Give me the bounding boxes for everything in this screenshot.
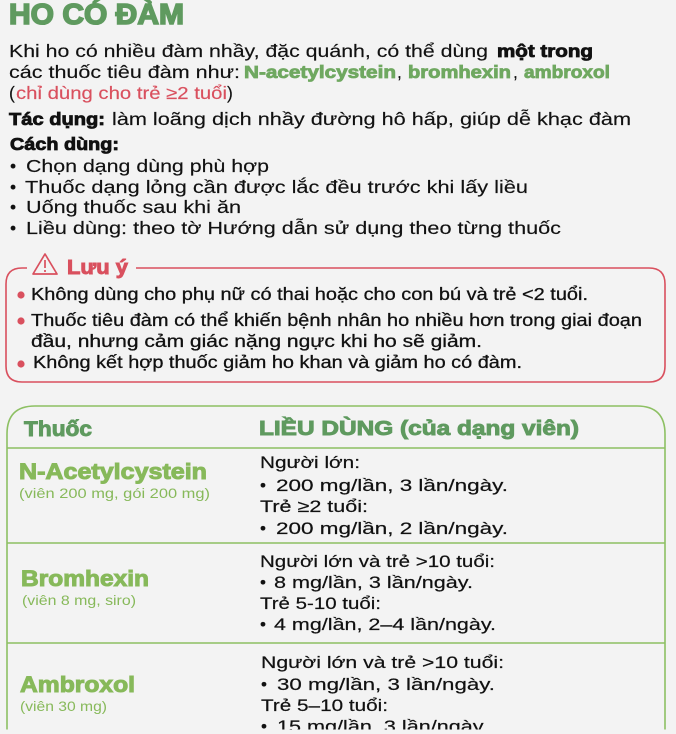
usage list: •: [10, 197, 16, 217]
usage list: •: [10, 218, 16, 238]
usage list: Thuốc dạng lỏng cần được lắc đều trước khi lấy liều: [25, 176, 528, 197]
row: N-Acetylcystein: 200 mg/lần, 2 lần/ngày.: [276, 519, 508, 538]
usage list: Cách dùng:: [10, 134, 119, 154]
row: Ambroxol: Người lớn và trẻ >10 tuổi:: [261, 653, 504, 672]
row: Bromhexin: Người lớn và trẻ >10 tuổi:: [260, 552, 495, 571]
usage list: •: [10, 177, 16, 197]
row: N-Acetylcystein: •: [260, 476, 266, 495]
intro text block: bromhexin: [408, 62, 511, 82]
row: N-Acetylcystein: •: [260, 519, 266, 538]
note items: Không dùng cho phụ nữ có thai hoặc cho con bú và trẻ <2 tuổi.: [31, 284, 588, 304]
row: N-Acetylcystein: Trẻ ≥2 tuổi:: [260, 497, 368, 516]
table header: LIỀU DÙNG (của dạng viên): [259, 416, 579, 440]
intro text block: ,: [397, 62, 402, 82]
panel: warning note: [6, 254, 665, 382]
row: Bromhexin: Bromhexin: [21, 566, 149, 591]
row: Bromhexin: •: [260, 573, 266, 592]
row: Bromhexin: 4 mg/lần, 2–4 lần/ngày.: [274, 615, 496, 634]
usage list: Liều dùng: theo tờ Hướng dẫn sử dụng theo từng thuốc: [26, 217, 561, 238]
usage list: [10, 134, 561, 238]
icon: warning triangle: [33, 254, 57, 274]
row: Bromhexin: (viên 8 mg, siro): [22, 593, 136, 608]
table header: Thuốc: [24, 418, 92, 441]
row: Ambroxol: •: [261, 675, 267, 694]
intro text block: (: [9, 83, 15, 103]
note items: Không kết hợp thuốc giảm ho khan và giảm ho có đàm.: [33, 352, 522, 372]
row: Ambroxol: Trẻ 5–10 tuổi:: [261, 696, 388, 715]
intro text block: Khi ho có nhiều đàm nhầy, đặc quánh, có thể dùng: [9, 41, 488, 61]
note items: Thuốc tiêu đàm có thể khiến bệnh nhân ho nhiều hơn trong giai đoạn: [31, 310, 642, 330]
effect line: Tác dụng:: [9, 109, 105, 129]
row: Bromhexin: Trẻ 5-10 tuổi:: [260, 594, 381, 613]
effect line: [9, 108, 631, 129]
intro text block: ambroxol: [524, 62, 610, 82]
row: Ambroxol: [20, 653, 504, 734]
note items: đầu, nhưng cảm giác nặng ngực khi ho sẽ giảm.: [31, 331, 482, 351]
intro text block: ): [227, 83, 233, 103]
intro text block: các thuốc tiêu đàm như:: [9, 62, 240, 82]
row: Ambroxol: Ambroxol: [20, 672, 135, 697]
panel: dosage table: [7, 406, 665, 734]
row: Bromhexin: •: [260, 615, 266, 634]
row: N-Acetylcystein: Người lớn:: [260, 453, 360, 472]
usage list: Chọn dạng dùng phù hợp: [26, 156, 269, 176]
table header: [24, 416, 579, 441]
intro text block: ,: [513, 62, 518, 82]
intro text block: một trong: [497, 41, 593, 61]
intro text block: [9, 41, 610, 103]
row: N-Acetylcystein: 200 mg/lần, 3 lần/ngày.: [276, 476, 508, 495]
note items: [17, 284, 642, 372]
row: Bromhexin: [21, 552, 496, 634]
row: Bromhexin: 8 mg/lần, 3 lần/ngày.: [274, 573, 473, 592]
effect line: làm loãng dịch nhầy đường hô hấp, giúp dễ khạc đàm: [112, 108, 631, 129]
note heading: Lưu ý: [67, 257, 129, 279]
row: N-Acetylcystein: N-Acetylcystein: [19, 459, 207, 484]
intro text block: N-acetylcystein: [244, 62, 396, 82]
row: Ambroxol: 30 mg/lần, 3 lần/ngày.: [277, 675, 495, 694]
usage list: Uống thuốc sau khi ăn: [26, 197, 241, 217]
row: N-Acetylcystein: (viên 200 mg, gói 200 mg): [19, 486, 210, 501]
usage list: •: [10, 156, 16, 176]
row: Ambroxol: (viên 30 mg): [20, 699, 107, 714]
intro text block: chỉ dùng cho trẻ ≥2 tuổi: [16, 83, 227, 103]
row: N-Acetylcystein: [19, 453, 508, 538]
